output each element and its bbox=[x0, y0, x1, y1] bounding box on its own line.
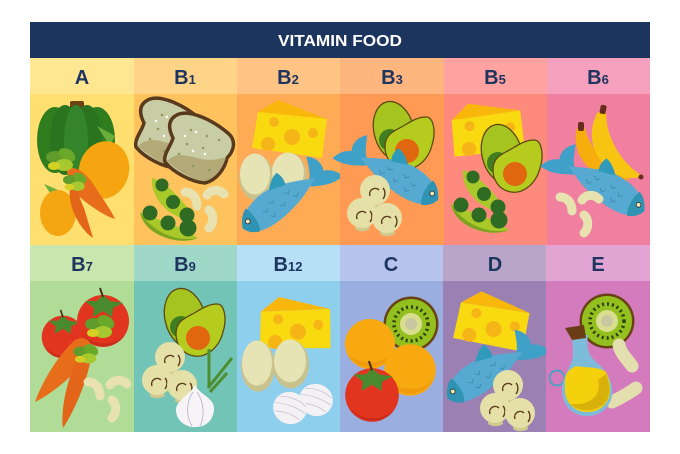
icon: garlic bbox=[176, 349, 232, 427]
icon: mushrooms bbox=[480, 370, 535, 431]
icon: cheese bbox=[453, 290, 531, 352]
icon: cashews bbox=[560, 195, 599, 233]
panel: vitamin B3 bbox=[331, 58, 451, 245]
label: D: D bbox=[488, 254, 502, 276]
icon: avocado bbox=[475, 120, 542, 192]
panel: vitamin D bbox=[433, 245, 553, 432]
icon: fish bbox=[433, 318, 553, 410]
label: B5: B5 bbox=[484, 67, 506, 89]
icon: mushrooms bbox=[142, 342, 197, 403]
icon: tomato bbox=[345, 361, 399, 422]
icon: kiwi bbox=[580, 294, 634, 348]
panel: vitamin B2 bbox=[227, 58, 346, 245]
icon: bread slices bbox=[136, 98, 233, 183]
panel: vitamin C bbox=[340, 245, 443, 432]
icon: mushrooms bbox=[347, 175, 402, 236]
panel: vitamin B1 bbox=[134, 58, 237, 245]
icon: fish bbox=[331, 124, 451, 212]
panel: vitamin B5 bbox=[443, 58, 547, 245]
title bar bbox=[30, 22, 650, 58]
icon: small mango bbox=[40, 184, 76, 236]
icon: avocado bbox=[367, 97, 434, 169]
icon: carrots bbox=[35, 312, 117, 428]
icon: cheese bbox=[443, 92, 530, 166]
icon: pea pods bbox=[451, 170, 509, 233]
icon: bananas bbox=[576, 105, 644, 180]
label: B7: B7 bbox=[71, 254, 93, 276]
icon: peanuts bbox=[612, 345, 636, 402]
icon: tomatoes bbox=[42, 288, 129, 358]
title bar: VITAMIN FOOD bbox=[278, 33, 402, 50]
panel: vitamin B9 bbox=[134, 245, 237, 432]
label: E: E bbox=[591, 254, 605, 276]
icon: eggs bbox=[241, 339, 309, 392]
icon: kiwi bbox=[384, 296, 438, 352]
panel: vitamin E bbox=[546, 245, 650, 432]
label: B9: B9 bbox=[174, 254, 196, 276]
icon: cashews bbox=[88, 380, 127, 418]
label: B12: B12 bbox=[274, 254, 302, 276]
icon: garlic cloves bbox=[269, 379, 337, 429]
label: B6: B6 bbox=[587, 67, 609, 89]
icon: cheese bbox=[253, 290, 336, 358]
icon: carrots bbox=[46, 145, 115, 238]
label: B2: B2 bbox=[277, 67, 299, 89]
panel: vitamin A bbox=[30, 58, 136, 245]
label: B3: B3 bbox=[381, 67, 403, 89]
icon: fish bbox=[227, 144, 346, 240]
icon: pea pods bbox=[140, 178, 198, 241]
panel: vitamin B12 bbox=[237, 245, 340, 432]
icon: oranges bbox=[345, 319, 436, 396]
panel: vitamin B6 bbox=[538, 58, 658, 245]
icon: cheese bbox=[252, 100, 327, 158]
icon: eggs bbox=[239, 152, 307, 200]
icon: oil bottle bbox=[550, 325, 612, 416]
icon: cashews bbox=[185, 190, 224, 228]
icon: large mango bbox=[72, 126, 136, 204]
icon: pumpkin bbox=[37, 101, 115, 175]
icon: avocado bbox=[158, 284, 225, 356]
label: C: C bbox=[384, 254, 398, 276]
label: A: A bbox=[75, 67, 89, 89]
label: B1: B1 bbox=[174, 67, 196, 89]
panel: vitamin B7 bbox=[30, 245, 134, 432]
icon: fish bbox=[538, 133, 658, 223]
